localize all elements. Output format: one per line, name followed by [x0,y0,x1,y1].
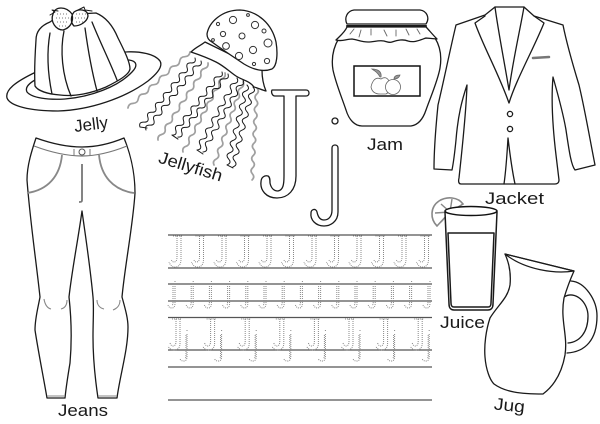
row 3: dotted J and j pairs [168,319,429,361]
label: Jelly: Jelly [73,113,110,136]
juice liquid [448,233,494,307]
hems [47,395,117,397]
plate [7,52,161,111]
knees [44,299,120,310]
plate inner rim [26,60,136,99]
label: Jellyfish: Jellyfish [156,148,225,185]
jar body [332,38,441,126]
jeans outline [27,138,135,398]
label: Juice: Juice [440,313,485,332]
illustration: jelly on a plate [7,7,161,111]
apples [371,69,400,94]
strawberries [52,8,88,30]
label: Jeans: Jeans [58,401,108,420]
label: Jug: Jug [493,394,526,417]
tentacles grey [128,52,258,180]
jug rim [505,254,574,272]
illustration: jug [485,254,597,394]
label: Jam: Jam [367,135,403,154]
fly [79,164,82,202]
illustration: jellyfish [128,10,277,180]
glass [445,212,497,310]
dome spots [212,14,272,66]
row 1: dotted capital J [169,236,430,267]
letter: small j outline [311,118,338,226]
ruled lines [168,235,432,400]
breast pocket [533,57,549,58]
dot of j [332,118,338,124]
stem and hook of j [311,145,338,226]
skirt [191,42,266,91]
illustration: jeans [27,138,135,398]
waistband [34,146,127,156]
label [354,66,420,96]
dome [207,10,277,70]
tentacles black [140,58,254,168]
lapels [475,7,544,103]
handwriting practice lines [168,235,432,400]
lemon slice [432,198,463,226]
row 2: dotted small j [168,281,430,308]
jelly mould [35,13,130,96]
pockets [27,155,134,193]
letter: capital J outline [261,90,309,198]
label: Jacket: Jacket [485,189,544,208]
illustration: juice glass [432,198,497,310]
jug body [485,254,574,394]
jelly ribs [48,22,117,96]
cloth cover [336,27,437,42]
vent [504,138,515,184]
illustration: jam jar [332,10,441,126]
lid [346,10,428,24]
jacket outline [434,7,595,184]
buttons [507,111,513,132]
illustration: jacket [434,7,595,184]
handle [564,281,597,353]
